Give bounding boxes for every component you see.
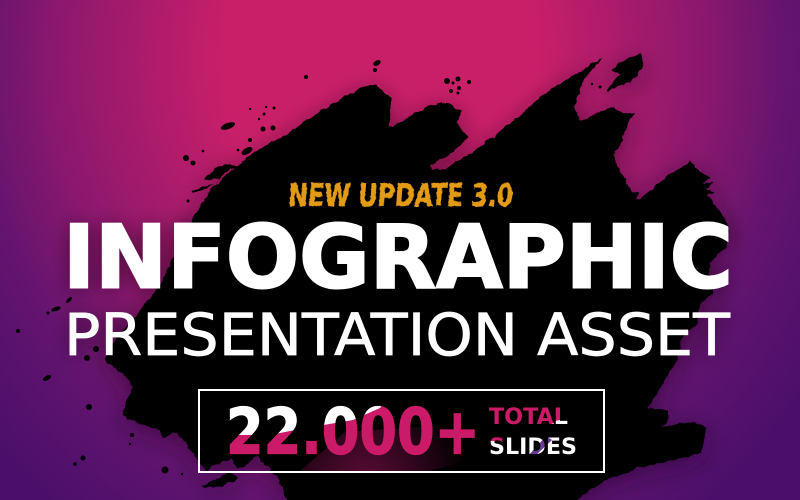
subtitle: new update: NEW UPDATE 3.0 <box>287 178 515 214</box>
title: infographic: INFOGRAPHIC <box>63 206 733 308</box>
title: presentation asset: PRESENTATION ASSET <box>64 302 731 369</box>
badge frame <box>199 390 604 472</box>
magenta glow inside badge <box>300 417 570 471</box>
badge: total slides <box>199 390 604 472</box>
label: slides: SLIDES <box>489 434 577 460</box>
number: 22.000+: 22.000+ <box>226 394 480 468</box>
black brush stroke <box>105 53 730 500</box>
label: total: TOTAL <box>489 404 568 430</box>
paint splatter <box>16 59 602 475</box>
